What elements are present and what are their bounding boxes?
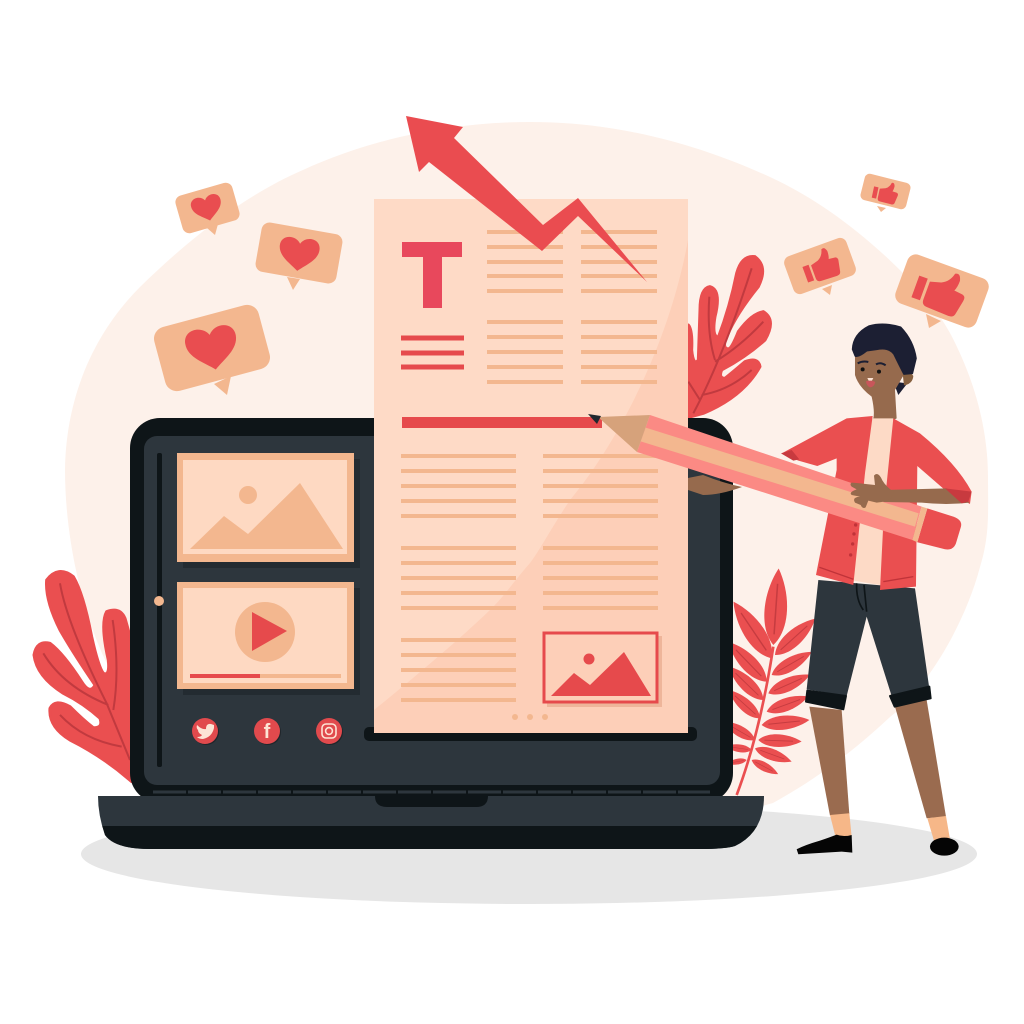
right sock: [927, 816, 950, 841]
person legs and shorts: [797, 580, 959, 856]
laptop notch: [375, 796, 488, 807]
hand: [850, 474, 893, 508]
laptop screen: [144, 436, 720, 785]
t-shirt: [853, 418, 893, 585]
eyebrows: [858, 362, 886, 365]
right shoe: [930, 838, 959, 856]
pencil stripe: [641, 428, 919, 527]
top text columns: [487, 232, 657, 382]
speech bubble: medium thumbs up: [782, 236, 858, 296]
left shoe: [797, 835, 852, 854]
laptop screen frame: [130, 418, 733, 803]
ferrule: [912, 507, 927, 542]
speech bubble: small heart: [174, 181, 241, 235]
speech bubble: medium heart: [254, 221, 344, 290]
plant: fern: [721, 568, 821, 795]
icon: twitter: [192, 718, 219, 745]
person upper body: [781, 324, 972, 590]
icon: facebook: [254, 718, 281, 745]
face and neck: [855, 347, 907, 422]
drawstring: [857, 583, 867, 612]
heading rule: [402, 417, 602, 428]
plant: left leaf: [34, 572, 132, 782]
jacket buttons: [849, 523, 857, 557]
eraser: [917, 508, 961, 550]
page dots: [512, 714, 548, 720]
pencil body: [637, 415, 922, 540]
hair: [853, 324, 916, 374]
ground shadow: [81, 804, 977, 904]
person left hand: [688, 475, 742, 495]
hair back: [893, 382, 907, 395]
icon: instagram: [316, 718, 343, 745]
left sock: [830, 813, 852, 839]
image card: [177, 453, 360, 568]
speech bubble: large thumbs up: [893, 252, 991, 330]
left leg: [809, 707, 849, 816]
jacket left panel: [782, 416, 873, 585]
right cuff: [890, 687, 931, 707]
paper shadow on screen: [364, 727, 697, 741]
lead: [588, 414, 601, 424]
article page: [374, 199, 688, 733]
jacket right panel: [880, 418, 972, 590]
keyboard keys: [153, 790, 710, 794]
mouth: [866, 380, 875, 387]
page sheet: [374, 199, 688, 733]
right cuff: [945, 488, 972, 503]
background blob: [65, 122, 988, 850]
wood tip: [598, 415, 650, 452]
lower text columns: [401, 456, 658, 700]
video card: [177, 582, 360, 695]
scroll bar: [154, 453, 164, 767]
shorts: [807, 580, 929, 696]
speech bubble: large heart: [151, 302, 273, 395]
growth arrow: [406, 116, 647, 282]
page image: [544, 633, 662, 707]
letter T: [402, 242, 462, 308]
left cuff: [806, 691, 846, 709]
laptop base: [98, 796, 764, 849]
page shade: [374, 240, 688, 733]
eyes: [861, 367, 881, 374]
plant: upper right leaf: [685, 257, 770, 418]
right leg: [895, 700, 946, 818]
laptop: [90, 418, 770, 851]
ear: [903, 372, 913, 385]
icon: facebook: f: [264, 721, 271, 743]
speech bubble: small thumbs up: [859, 173, 912, 212]
person forearm and hand: [850, 474, 972, 508]
pencil: [588, 414, 961, 550]
title lines: [401, 338, 464, 367]
forearm: [883, 488, 970, 504]
left cuff: [781, 450, 799, 461]
laptop base lower shade: [102, 826, 757, 849]
pockets: [819, 567, 913, 582]
